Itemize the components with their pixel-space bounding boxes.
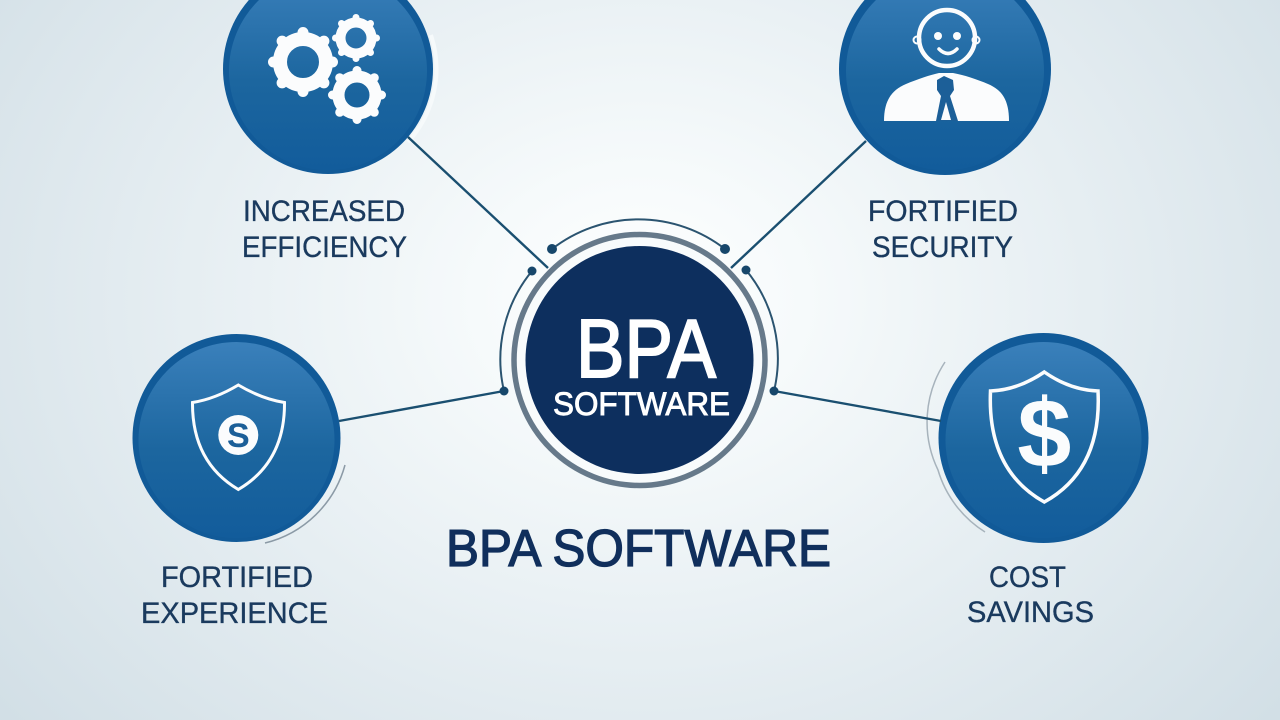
node circle <box>132 334 345 543</box>
panel: fortified experience <box>132 334 345 630</box>
label: fortified security <box>868 195 1018 264</box>
node circle <box>839 0 1051 175</box>
label: cost savings: COST <box>989 561 1066 594</box>
node circle <box>927 333 1148 543</box>
panel: increased efficiency <box>223 0 436 264</box>
hub text: BPA: BPA <box>576 302 717 395</box>
hub text: SOFTWARE: SOFTWARE <box>553 386 730 422</box>
label: fortified experience <box>141 561 328 630</box>
label: fortified security: FORTIFIED <box>868 195 1018 228</box>
label: fortified security: SECURITY <box>872 231 1013 264</box>
hub ring <box>514 234 765 486</box>
icon: shield with coin <box>192 385 285 490</box>
icon: person with tie <box>884 10 1009 121</box>
connector lines <box>339 137 941 421</box>
label: fortified experience: FORTIFIED <box>161 561 313 594</box>
icon: shield with dollar <box>990 372 1098 502</box>
label: cost savings: SAVINGS <box>967 596 1094 629</box>
icon: shield with dollar: $ <box>1017 379 1071 488</box>
label: fortified experience: EXPERIENCE <box>141 597 328 630</box>
panel: fortified security <box>839 0 1051 264</box>
hub arcs and dots <box>500 219 778 396</box>
node circle <box>223 0 436 174</box>
central hub <box>500 219 778 485</box>
label: cost savings <box>967 561 1094 629</box>
hub disc <box>526 246 754 474</box>
panel: cost savings <box>927 333 1148 629</box>
label: increased efficiency: INCREASED <box>243 195 405 228</box>
label: increased efficiency: EFFICIENCY <box>242 231 407 264</box>
icon: gears <box>274 18 382 120</box>
label: increased efficiency <box>242 195 407 264</box>
title: BPA SOFTWARE <box>446 520 831 578</box>
icon: shield with coin: S <box>227 417 250 455</box>
